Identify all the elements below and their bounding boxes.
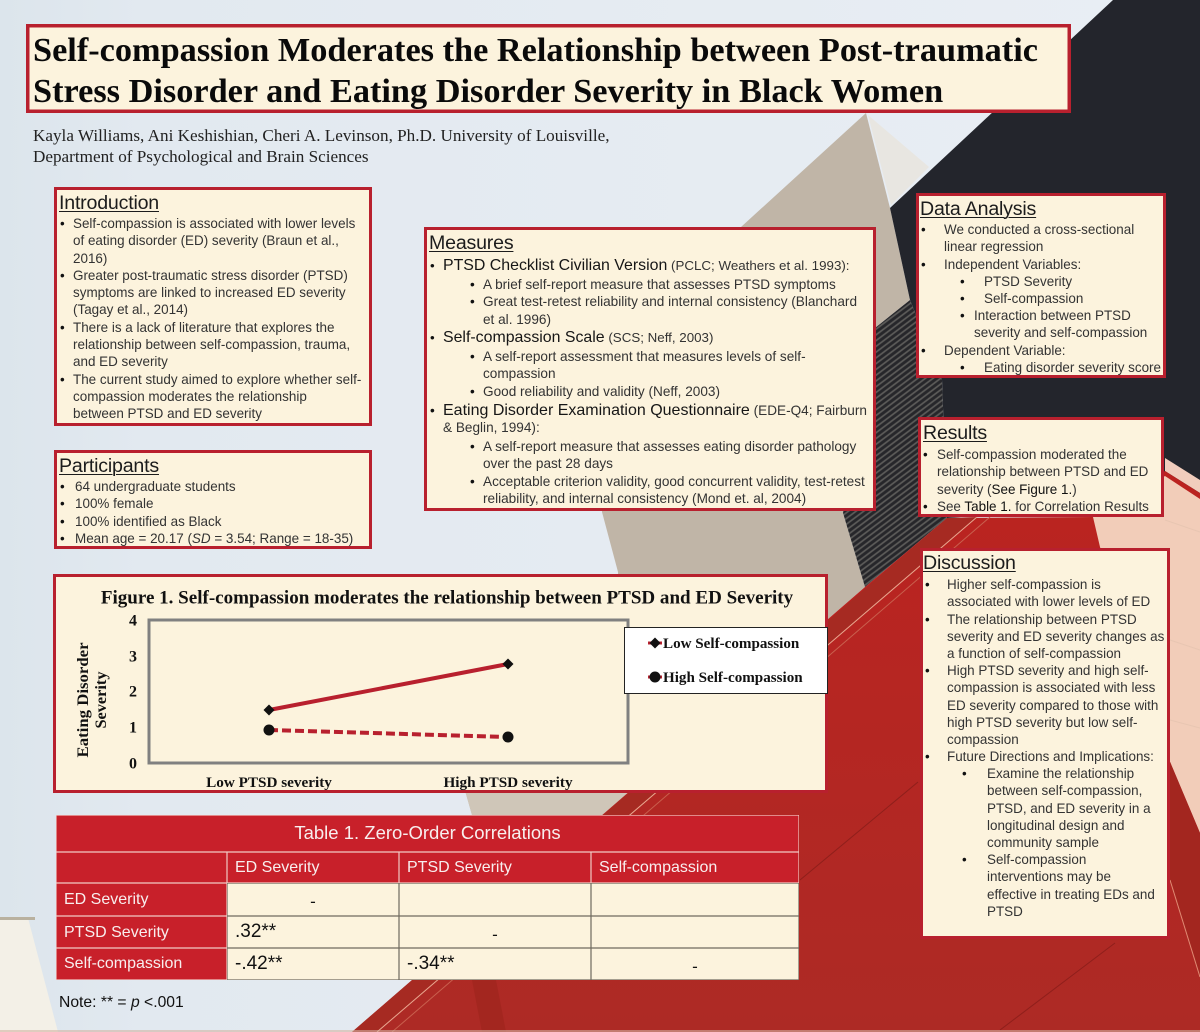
panel: discussion: • (925, 749, 930, 764)
panel: data analysis: • (960, 291, 965, 306)
panel: data analysis: • (921, 257, 926, 272)
panel: data analysis: • (960, 360, 965, 375)
panel: discussion: • (925, 577, 930, 592)
legend (624, 628, 828, 694)
y axis label: Severity (93, 671, 110, 728)
panel: figure 1 (53, 574, 828, 793)
panel: introduction: • (60, 268, 65, 283)
series: high self-compassion (264, 724, 514, 742)
y axis ticks: 4 (129, 612, 137, 630)
heading: discussion: Discussion (923, 552, 1016, 574)
panel: introduction (54, 187, 372, 426)
y axis ticks: 3 (129, 648, 137, 666)
row: ED severity: ED Severity (64, 891, 148, 908)
panel: measures: • (470, 384, 475, 399)
table title: Table 1. Zero-Order Correlations (294, 822, 561, 843)
authors and affiliation: Kayla Williams, Ani Keshishian, Cheri A. Levinson, Ph.D. University of Louisville, Department of Psychological and Brain Sciences (33, 126, 610, 166)
row: ED severity (56, 883, 799, 916)
header row: ED Severity (235, 859, 319, 876)
text: bullet 1: Self-compassion is associated with lower levels of eating disorder (ED) severity (Braun et al., 2016) (73, 216, 355, 266)
panel: data analysis (916, 193, 1166, 378)
panel: discussion: • (962, 766, 967, 781)
panel: discussion: • (962, 852, 967, 867)
text: discussion bullets: Higher self-compassion is associated with lower levels of ED The relationship between PTSD severity and ED severity changes as a function of self-compassion High PTSD severity and high self- compassion is associated with less ED severity compared to those with high PTSD severity but low self- compassion Future Directions and Implications: (947, 577, 1164, 764)
panel: measures: • (430, 258, 435, 273)
text: bullet 2: Greater post-traumatic stress disorder (PTSD) symptoms are linked to increased ED severity (Tagay et al., 2014) (73, 268, 348, 317)
panel: introduction: • (60, 216, 65, 231)
text: PCL-C heading: PTSD Checklist Civilian Version (PCLC; Weathers et al. 1993): (443, 257, 850, 274)
header row: PTSD Severity (407, 859, 512, 876)
panel: results (918, 417, 1164, 517)
row: PTSD severity: - (492, 925, 498, 944)
row: self-compassion: -.42** (235, 953, 283, 974)
panel: introduction: • (60, 320, 65, 335)
title: Self-compassion Moderates the Relationship between Post-traumatic Stress Disorder and Eating Disorder Severity in Black Women (33, 31, 1038, 110)
y axis ticks: 2 (129, 684, 137, 700)
panel: introduction: • (60, 372, 65, 387)
heading: data analysis: Data Analysis (920, 198, 1036, 220)
text: bullet 3: There is a lack of literature that explores the relationship between self-compassion, trauma, and ED severity (73, 320, 350, 369)
panel: measures (424, 227, 876, 511)
panel: participants: • (60, 496, 65, 511)
text: SCS heading: Self-compassion Scale (SCS; Neff, 2003) (443, 329, 713, 346)
text: bullet 4: The current study aimed to explore whether self- compassion moderates the relationship between PTSD and ED severity (73, 372, 361, 421)
panel: measures: • (470, 277, 475, 292)
panel: discussion: • (925, 663, 930, 678)
plot area (149, 620, 628, 763)
x axis labels: Low PTSD severity (206, 774, 332, 791)
panel: measures: • (470, 474, 475, 489)
text: EDE-Q details: A self-report measure that assesses eating disorder pathology over the past 28 days Acceptable criterion validity, good concurrent validity, test-retest reliability, and internal consistency (Mond et. al, 2004) (483, 439, 865, 506)
legend: High Self-compassion (663, 670, 803, 686)
row: self-compassion: -.34** (407, 953, 455, 974)
text: interaction term: Interaction between PTSD severity and self-compassion (974, 308, 1147, 340)
y axis label: Eating Disorder (75, 642, 92, 757)
panel: discussion (920, 548, 1170, 939)
text: dependent variable: Dependent Variable: (944, 343, 1066, 358)
header row (56, 852, 799, 883)
x axis labels: High PTSD severity (443, 774, 573, 791)
panel: measures: • (430, 403, 435, 418)
panel: measures: • (470, 439, 475, 454)
heading: participants: Participants (59, 455, 159, 477)
y axis ticks: 0 (129, 756, 137, 772)
panel: measures: • (430, 330, 435, 345)
panel: participants (54, 450, 372, 549)
y axis ticks: 1 (129, 720, 137, 736)
table 1: zero-order correlations (56, 815, 799, 980)
text: EDE-Q heading: Eating Disorder Examination Questionnaire (EDE-Q4; Fairburn & Beglin, 1994): (443, 402, 867, 435)
panel: discussion: • (925, 612, 930, 627)
y axis ticks (129, 612, 137, 772)
heading: introduction: Introduction (59, 192, 159, 214)
row: PTSD severity: PTSD Severity (64, 924, 169, 941)
text: participant bullets: 64 undergraduate students 100% female 100% identified as Black Mean age = 20.17 (SD = 3.54; Range = 18-35) (75, 479, 353, 546)
header row: Self-compassion (599, 859, 717, 876)
line chart (75, 588, 828, 791)
legend: Low Self-compassion (663, 636, 800, 652)
text: analysis overview: We conducted a cross-sectional linear regression Independent Variables: (944, 222, 1134, 272)
row: ED severity: - (310, 892, 316, 911)
figure heading: Figure 1. Self-compassion moderates the relationship between PTSD and ED Severity (101, 588, 794, 608)
text: PCL-C details: A brief self-report measure that assesses PTSD symptoms Great test-retest reliability and internal consistency (Blanchard et al. 1996) (483, 277, 857, 327)
heading: measures: Measures (429, 232, 513, 254)
panel: results: • (923, 499, 928, 514)
panel: measures: • (470, 294, 475, 309)
text: SCS details: A self-report assessment that measures levels of self- compassion Good reliability and validity (Neff, 2003) (483, 349, 806, 399)
table note: Note: ** = p <.001 (59, 994, 184, 1011)
panel: data analysis: • (960, 274, 965, 289)
text: results bullets: Self-compassion moderated the relationship between PTSD and ED severity (See Figure 1.) See Table 1. for Correlation Results (937, 447, 1149, 514)
row: self-compassion (56, 948, 799, 980)
row: self-compassion: - (692, 957, 698, 976)
series: low self-compassion (264, 658, 514, 716)
panel: data analysis: • (960, 308, 965, 323)
x axis labels (206, 774, 573, 791)
panel: participants: • (60, 531, 65, 546)
panel: results: • (923, 447, 928, 462)
panel: data analysis: • (921, 222, 926, 237)
panel: measures: • (470, 349, 475, 364)
panel: participants: • (60, 514, 65, 529)
row: PTSD severity: .32** (235, 921, 276, 942)
text: future directions: Examine the relationship between self-compassion, PTSD, and ED severity in a longitudinal design and community sample Self-compassion interventions may be effective in treating EDs and PTSD (987, 766, 1155, 919)
y axis label (75, 642, 110, 758)
panel: participants: • (60, 479, 65, 494)
text: independent variables: PTSD Severity Self-compassion (984, 274, 1083, 306)
row: self-compassion: Self-compassion (64, 955, 182, 972)
table title (56, 815, 799, 852)
row: PTSD severity (56, 916, 799, 948)
panel: data analysis: • (921, 343, 926, 358)
text: dependent variable detail: Eating disorder severity score (984, 360, 1161, 375)
heading: results: Results (923, 422, 987, 444)
